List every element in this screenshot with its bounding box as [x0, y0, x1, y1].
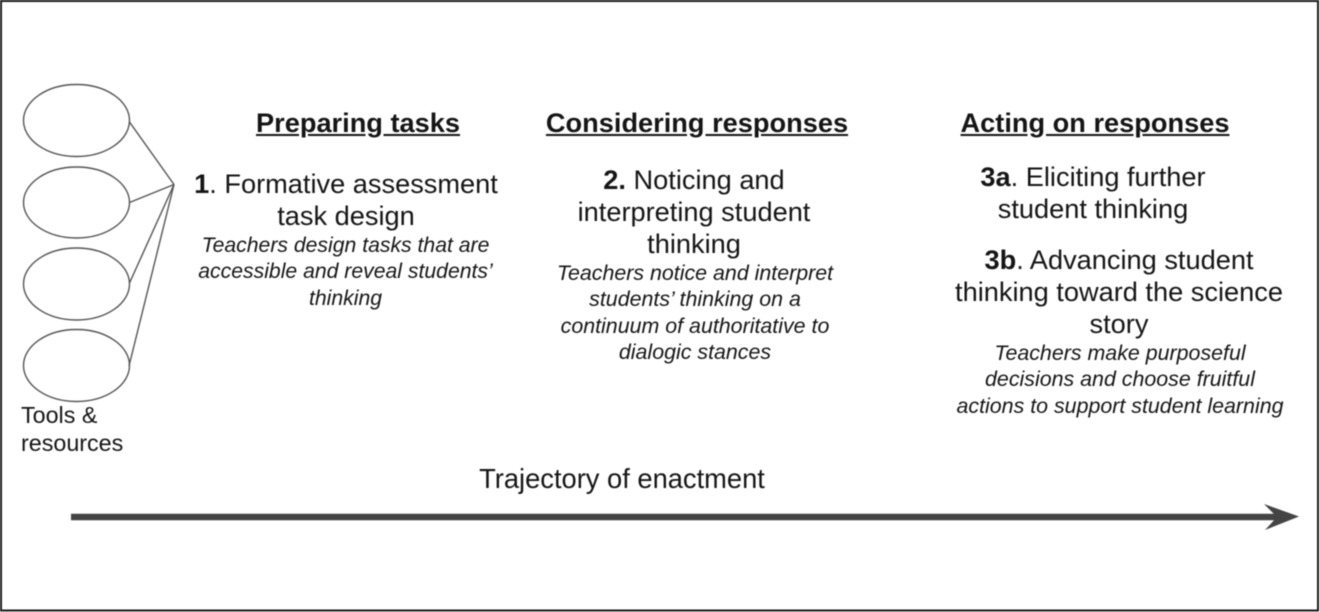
text block: step 2: 2. Noticing and	[603, 164, 785, 195]
description: step 1: thinking	[309, 287, 382, 310]
description: step 3	[956, 341, 1284, 418]
description: step 1: accessible and reveal students’	[198, 260, 493, 283]
label: tools and resources	[20, 402, 124, 456]
text block: step 3b	[954, 244, 1283, 340]
text block: step 1: task design	[277, 200, 415, 231]
text block: step 3a	[980, 161, 1206, 224]
text block: step 3a: 3a. Eliciting further	[980, 161, 1206, 192]
connector lines	[129, 122, 174, 366]
text block: step 3b: 3b. Advancing student	[984, 244, 1254, 275]
description: step 1	[198, 234, 494, 310]
heading: considering responses: Considering responses	[546, 107, 848, 138]
heading: preparing tasks: Preparing tasks	[256, 107, 460, 138]
description: step 2: continuum of authoritative to	[561, 314, 829, 338]
text block: step 1: 1. Formative assessment	[194, 168, 498, 199]
description: step 3: Teachers make purposeful	[994, 341, 1246, 365]
description: step 3: actions to support student learning	[956, 394, 1284, 418]
text block: step 2	[578, 164, 811, 260]
text block: step 2: thinking	[647, 228, 741, 259]
heading: acting on responses: Acting on responses	[961, 107, 1229, 138]
tools and resources ovals	[24, 84, 130, 402]
description: step 1: Teachers design tasks that are	[202, 234, 489, 257]
label: tools and resources: resources	[21, 430, 123, 456]
label: tools and resources: Tools &	[21, 402, 97, 428]
description: step 3: decisions and choose fruitful	[985, 367, 1255, 391]
description: step 2: Teachers notice and interpret	[557, 261, 833, 285]
description: step 2	[557, 261, 834, 364]
description: step 2: students’ thinking on a	[589, 287, 801, 311]
text block: step 3a: student thinking	[998, 193, 1188, 224]
trajectory arrow	[71, 504, 1299, 530]
text block: step 1	[194, 168, 498, 232]
text block: step 3b: story	[1090, 308, 1148, 339]
description: step 2: dialogic stances	[619, 340, 771, 364]
label: trajectory of enactment: Trajectory of enactment	[479, 463, 765, 494]
text block: step 2: interpreting student	[578, 196, 810, 227]
text block: step 3b: thinking toward the science	[955, 276, 1283, 307]
